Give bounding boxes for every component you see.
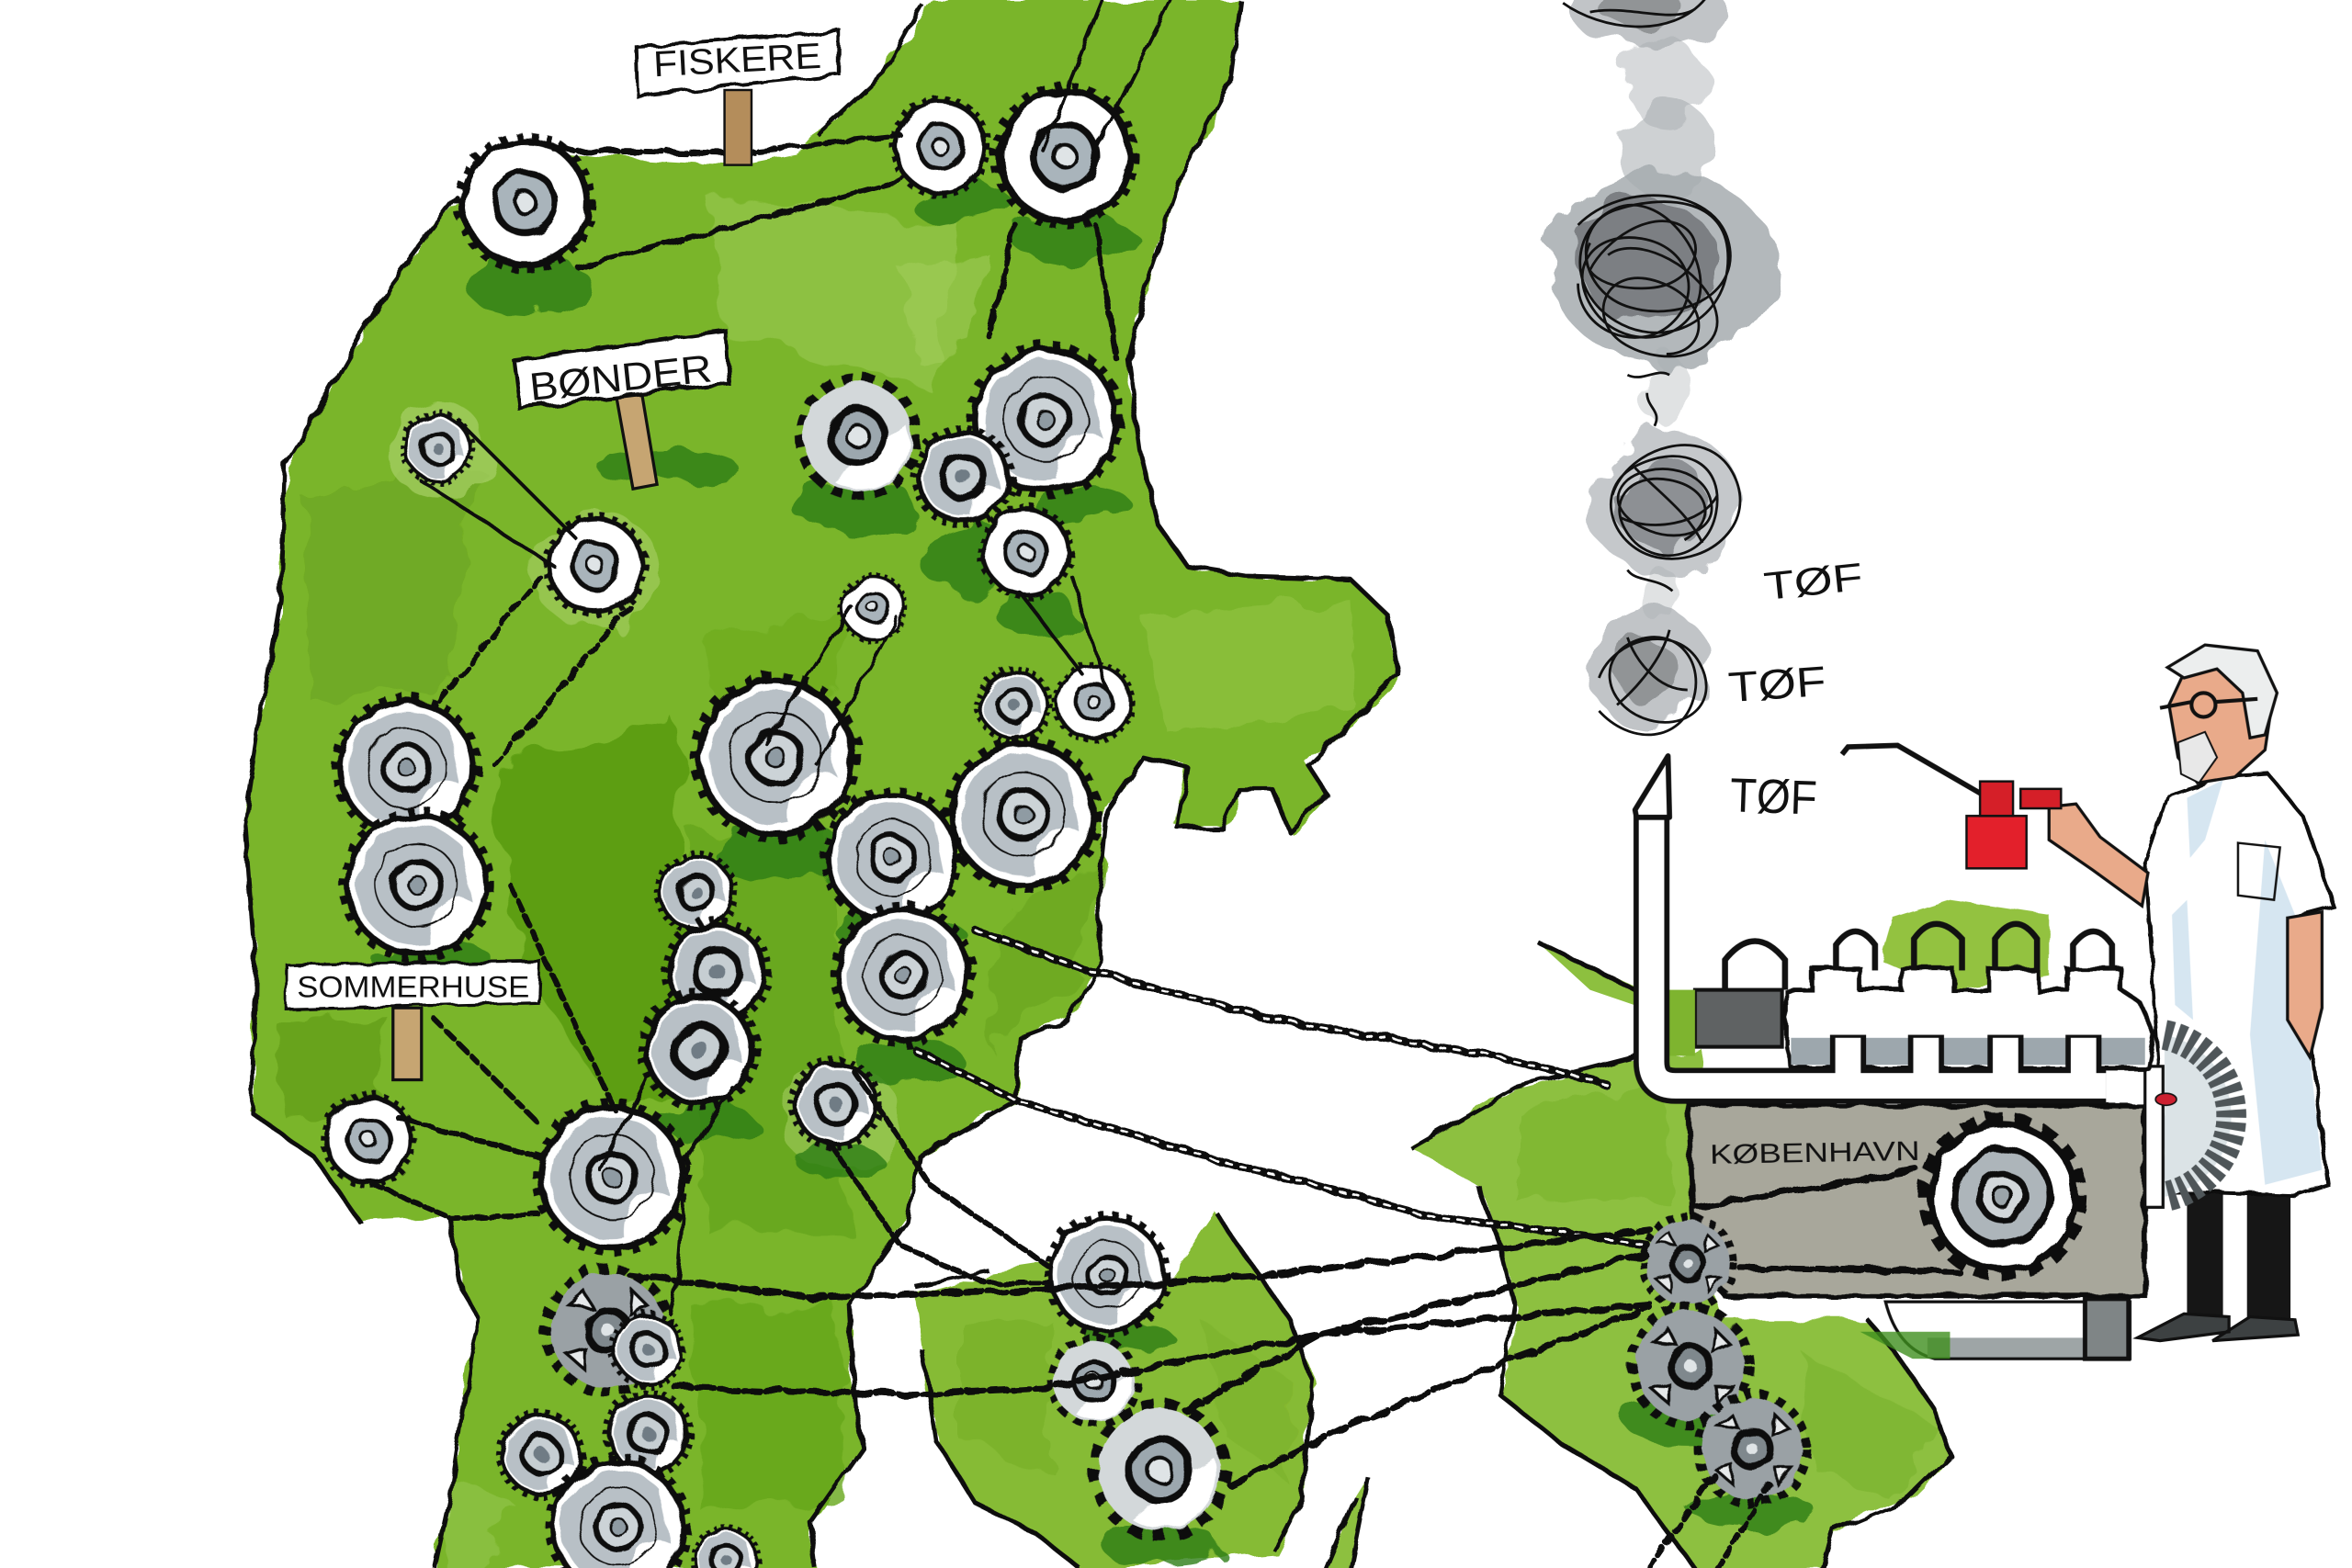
gear 23 — [324, 1095, 414, 1185]
map: darker and lighter washes — [273, 195, 1935, 1568]
gear 22 — [792, 1060, 879, 1147]
figure: right arm — [2288, 912, 2322, 1057]
smoke: dark core — [1578, 0, 1716, 702]
machine: white engine block — [1785, 969, 2154, 1067]
machine: grey base housing — [1689, 1105, 2145, 1296]
gear 11 — [978, 669, 1050, 741]
gears across the map — [324, 87, 2078, 1568]
machine: foot — [2085, 1299, 2129, 1359]
sign: SOMMERHUSE — [287, 962, 540, 1080]
sound word: TØF top: TØF — [1762, 555, 1865, 608]
gear 36 — [1700, 1396, 1804, 1501]
gear 8 — [403, 414, 472, 483]
figure: shoes — [2138, 1314, 2298, 1341]
label: KØBENHAVN: KØBENHAVN — [1710, 1136, 1920, 1170]
gear 29 — [549, 1458, 687, 1568]
figure: beard — [2178, 732, 2217, 783]
chains: west Jutland — [435, 578, 630, 1125]
gear 33 — [1096, 1406, 1223, 1533]
sign board — [636, 31, 840, 96]
gear 25 — [548, 1271, 667, 1390]
figure: coat pocket — [2238, 843, 2280, 900]
gear 35 — [1634, 1310, 1747, 1423]
machine: red indicator button — [2155, 1093, 2177, 1105]
gear 2 — [892, 99, 989, 195]
gear 1 — [459, 137, 591, 268]
figure: oil can — [1842, 745, 2061, 868]
map: Jutland green wash — [244, 0, 1398, 1568]
chains: south Jutland — [375, 1072, 1050, 1282]
gear 17 — [825, 790, 960, 925]
map: Langeland sliver — [1326, 1477, 1368, 1568]
machine: green land on top — [1881, 900, 2049, 990]
figure: glasses — [2160, 693, 2257, 716]
figure: trousers — [2187, 1192, 2290, 1320]
machine: side flywheel — [2165, 1035, 2232, 1197]
gear 15 — [336, 697, 477, 839]
gear 24 — [537, 1102, 687, 1252]
gear 16 — [344, 811, 491, 958]
sign label: BØNDER — [527, 346, 714, 409]
figure: forearm and hand — [2049, 804, 2148, 906]
gear 20 — [666, 920, 768, 1023]
figure: head — [2169, 654, 2274, 783]
gear 30 — [693, 1527, 759, 1568]
map: Funen green wash — [915, 1212, 1313, 1568]
gear 28 — [500, 1413, 583, 1496]
map: coastline ink — [244, 0, 1950, 1568]
gear 5 — [801, 380, 914, 493]
gear 4 — [970, 345, 1121, 495]
sign: BØNDER — [513, 332, 729, 489]
chains: south Zealand — [1650, 1470, 1770, 1568]
gear 13 — [695, 676, 856, 839]
gear 9 — [546, 516, 645, 615]
gear 14 — [948, 739, 1098, 889]
machine: grey under engine — [1791, 1038, 2145, 1065]
sign board — [287, 962, 540, 1010]
gear 10 — [840, 574, 906, 640]
smoke: grey washes — [1548, 0, 1776, 730]
gear 12 — [1055, 663, 1133, 741]
sign post — [393, 1008, 422, 1080]
gear 27 — [606, 1392, 690, 1476]
map: north Zealand strip — [1537, 942, 1643, 1008]
map: Zealand green wash — [1410, 1050, 1950, 1568]
gear 19 — [657, 853, 735, 931]
gear 3 — [996, 87, 1134, 225]
gear drop shadows on the map — [375, 180, 1815, 1566]
machine: dark block — [1695, 990, 1782, 1047]
belts: gear 21 to gear 24 — [600, 1080, 732, 1313]
map of Denmark — [244, 0, 1950, 1568]
sign: FISKERE — [636, 31, 840, 165]
machine: right side panel — [2145, 1066, 2163, 1207]
gear 6 — [915, 429, 1011, 525]
smoke: ink scribbles — [1563, 0, 1740, 735]
sign post — [616, 394, 657, 489]
machine: ground shadow and roller — [1885, 1302, 2130, 1359]
belts: top of map — [420, 0, 1170, 765]
gear 18 — [834, 906, 972, 1043]
smoke plume — [1548, 0, 1776, 735]
chains: drive to machine flywheel — [1695, 1170, 1959, 1272]
sign board — [513, 332, 729, 408]
chain link holes — [915, 930, 1650, 1245]
gear 34 — [1644, 1219, 1732, 1307]
gear 26 — [612, 1314, 684, 1386]
chains linking the gears — [375, 0, 1959, 1568]
machine: exhaust pipe — [1635, 756, 2106, 1086]
sign label: SOMMERHUSE — [297, 970, 529, 1004]
gear 32 — [1052, 1340, 1135, 1423]
sound word: TØF bottom: TØF — [1729, 769, 1818, 826]
figure: man in white coat with oil can — [1842, 645, 2334, 1341]
gear 21 — [642, 993, 756, 1107]
machine: rocker arches — [1725, 924, 2112, 990]
chains: to Copenhagen — [915, 930, 1650, 1245]
sign post — [725, 90, 752, 165]
chains: north Jutland — [555, 135, 1117, 360]
sound word: TØF middle: TØF — [1727, 658, 1827, 711]
machine: copenhagen engine — [1635, 756, 2232, 1359]
chains: across Funen to Zealand — [630, 1230, 1650, 1484]
figure: coat blue shading — [2172, 780, 2322, 1185]
sign label: FISKERE — [652, 37, 822, 85]
gear 7 — [981, 507, 1071, 597]
gear 37: machine flywheel — [1927, 1121, 2078, 1273]
figure: white coat — [2145, 773, 2334, 1195]
figure: hair — [2167, 645, 2277, 738]
gear 31 — [1047, 1214, 1167, 1335]
